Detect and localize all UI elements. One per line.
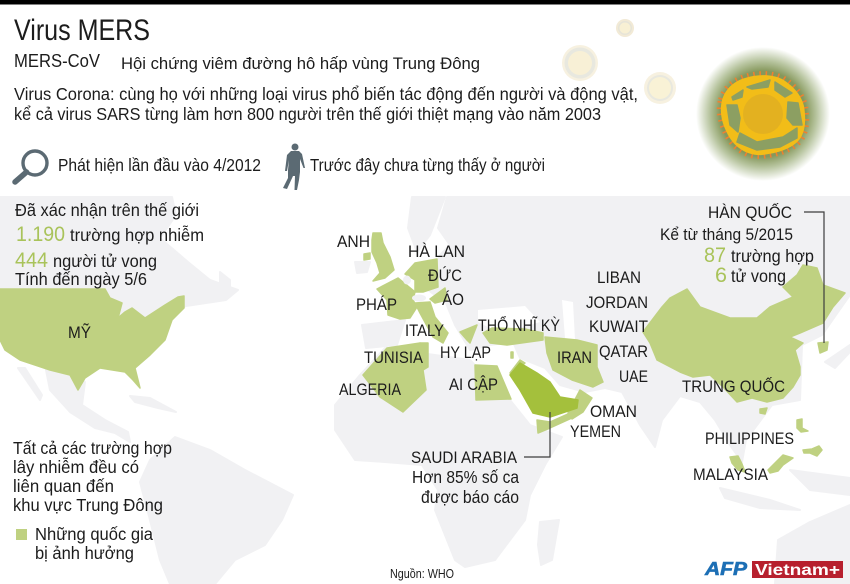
small virus: right (644, 72, 676, 104)
callout: South Korea: trường hợp (731, 246, 814, 266)
top bar (0, 0, 850, 4)
logo: AFP: AFP (704, 559, 748, 579)
country labels: PHÁP (356, 295, 397, 314)
large virus (696, 47, 830, 181)
title: Virus MERS (14, 14, 150, 47)
callout: South Korea: 87 (704, 244, 726, 267)
panel: worldwide figures: Đã xác nhận trên thế giới (15, 200, 199, 220)
affected countries (0, 233, 845, 473)
Oman and UAE (568, 390, 592, 419)
callout: Saudi Arabia (411, 412, 550, 507)
country labels: TRUNG QUỐC (682, 376, 785, 396)
description: kể cả virus SARS từng làm hơn 800 người trên thế giới thiệt mạng vào năm 2003 (14, 104, 601, 124)
source: Nguồn: WHO (390, 567, 454, 581)
country labels (337, 233, 794, 484)
first detected: Phát hiện lần đầu vào 4/2012 (58, 155, 261, 175)
United States (0, 289, 184, 390)
Jordan and Lebanon (510, 360, 525, 373)
Italy (415, 302, 448, 343)
callout: South Korea: Kể từ tháng 5/2015 (660, 226, 793, 244)
panel: worldwide figures: 444 (15, 249, 48, 272)
Germany and Netherlands (405, 259, 438, 292)
callout: Saudi Arabia: Hơn 85% số ca (412, 467, 519, 487)
country labels: ITALY (405, 322, 444, 340)
panel: worldwide figures: 1.190 (16, 223, 65, 246)
country labels: PHILIPPINES (705, 430, 794, 448)
note: Middle East link: Tất cả các trường hợp (13, 438, 172, 458)
Malaysia (730, 456, 745, 472)
country labels: OMAN (590, 403, 637, 421)
small virus: top (616, 19, 634, 37)
country labels: MALAYSIA (693, 466, 768, 484)
callout: South Korea (660, 202, 824, 343)
note: Middle East link: lây nhiễm đều có (13, 456, 139, 477)
Yemen (537, 413, 572, 433)
icon: magnifying glass (15, 151, 47, 182)
logo: Vietnam+: Vietnam+ (755, 562, 840, 579)
Greece (460, 325, 477, 343)
callout: South Korea: tử vong (731, 266, 786, 286)
Switzerland and Belgium (403, 276, 426, 302)
China (643, 265, 845, 402)
United Kingdom (372, 233, 394, 281)
Austria (430, 288, 447, 303)
note: Middle East link: khu vực Trung Đông (13, 495, 163, 515)
panel: worldwide figures (15, 200, 204, 289)
country labels: TUNISIA (364, 349, 423, 367)
Iran (545, 337, 603, 387)
country labels: KUWAIT (589, 318, 648, 336)
country labels: AI CẬP (449, 375, 498, 394)
panel: worldwide figures: trường hợp nhiễm (70, 224, 204, 245)
Turkey (483, 328, 543, 345)
description (14, 84, 638, 124)
South Korea (818, 342, 828, 353)
panel: worldwide figures: người tử vong (53, 251, 157, 271)
France (377, 278, 417, 319)
Hainan (760, 408, 767, 414)
Egypt (475, 365, 511, 400)
world map (0, 197, 850, 584)
callout: South Korea: 6 (715, 264, 727, 287)
Tunisia (420, 343, 428, 370)
country labels: YEMEN (570, 423, 621, 441)
country labels: IRAN (557, 349, 592, 367)
subtitle: syndrome name: Hội chứng viêm đường hô hấp vùng Trung Đông (121, 54, 480, 73)
subtitle: MERS-CoV: MERS-CoV (14, 50, 101, 71)
legend: Những quốc gia (35, 524, 153, 544)
country labels: ANH (337, 233, 370, 251)
country labels: ALGERIA (339, 381, 401, 399)
country labels: QATAR (599, 343, 648, 361)
country labels: THỔ NHĨ KỲ (478, 315, 560, 335)
country labels: LIBAN (597, 269, 641, 287)
legend: bị ảnh hưởng (35, 543, 134, 563)
legend (16, 524, 153, 563)
icon: human figure (283, 144, 305, 190)
country labels: ĐỨC (428, 266, 462, 285)
country labels: HY LẠP (440, 344, 491, 362)
country labels: UAE (619, 368, 648, 386)
Saudi Arabia (510, 363, 578, 417)
callout: Saudi Arabia: được báo cáo (421, 487, 519, 507)
never seen in humans: Trước đây chưa từng thấy ở người (310, 155, 545, 175)
small virus: middle (562, 45, 598, 81)
unaffected land (0, 197, 850, 584)
Philippines (797, 419, 808, 432)
panel: worldwide figures: Tính đến ngày 5/6 (15, 269, 147, 289)
note: Middle East link: liên quan đến (13, 476, 114, 496)
country labels: ÁO (442, 290, 464, 309)
Algeria (363, 343, 426, 412)
country labels: JORDAN (586, 294, 648, 312)
callout: Saudi Arabia: SAUDI ARABIA (411, 449, 517, 467)
label: United States: MỸ (68, 322, 91, 342)
inland seas (478, 300, 575, 340)
callout: South Korea: HÀN QUỐC (708, 202, 792, 222)
note: Middle East link (13, 438, 172, 515)
description: Virus Corona: cùng họ với những loại virus phổ biến tác động đến người và động vật, (14, 84, 638, 104)
country labels: HÀ LAN (408, 242, 465, 261)
